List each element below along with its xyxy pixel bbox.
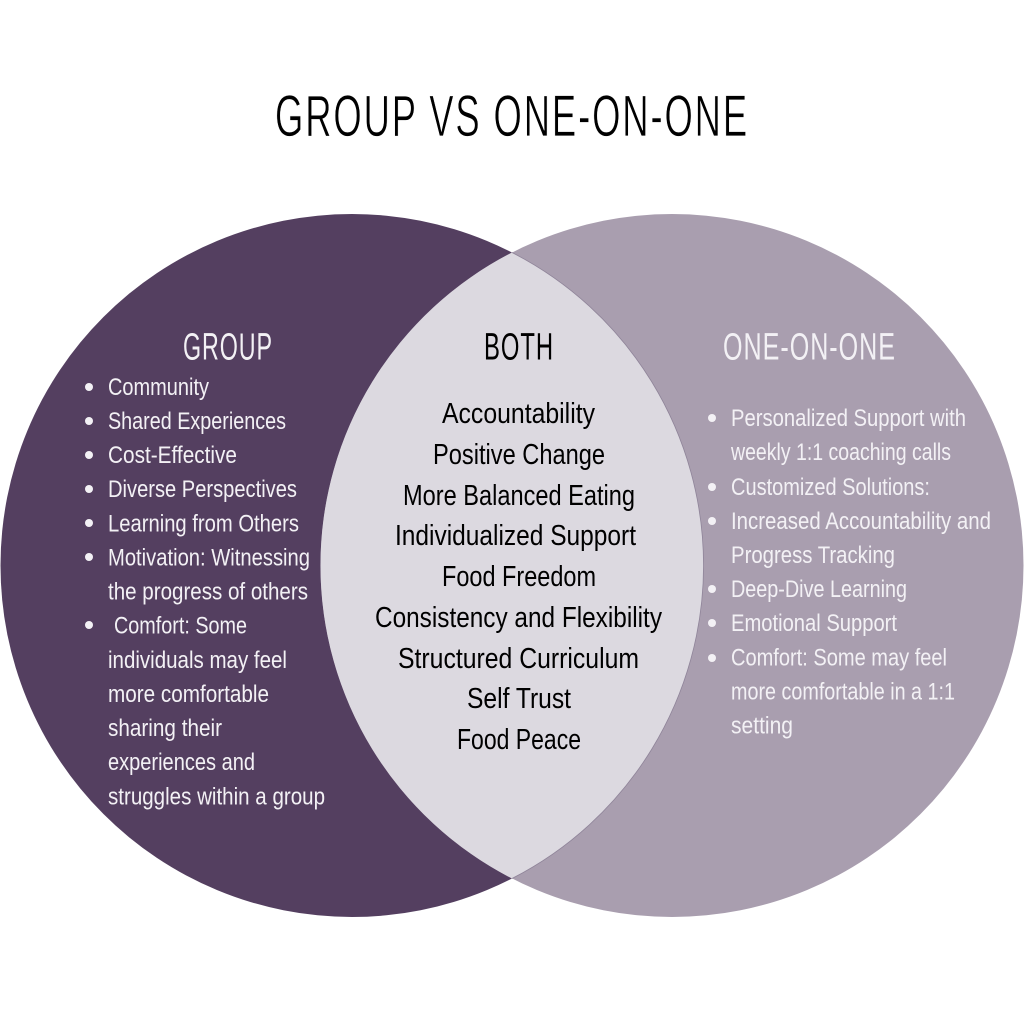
panel: both (375, 326, 662, 756)
bullet list: group: Learning from Others (108, 510, 299, 538)
bullet list: group: struggles within a group (108, 784, 325, 810)
title: GROUP VS ONE-ON-ONE (275, 84, 749, 149)
venn diagram (0, 214, 1024, 917)
list: both: Food Peace (457, 724, 581, 756)
list: both: Food Freedom (442, 561, 596, 593)
bullet list: group: Motivation: Witnessing (108, 544, 310, 572)
bullet list: group: individuals may feel (108, 647, 287, 674)
panel: one-on-one (708, 326, 991, 740)
bullet list: one-on-one: Progress Tracking (731, 542, 895, 569)
bullet list: group: Diverse Perspectives (108, 476, 297, 503)
bullet list: one-on-one: Personalized Support with (731, 405, 966, 432)
bullet list: group: the progress of others (108, 578, 308, 606)
list: both: Structured Curriculum (398, 643, 639, 675)
circle: one-on-one (320, 214, 1024, 917)
list: both: Consistency and Flexibility (375, 602, 662, 634)
bullet list: one-on-one (708, 405, 991, 740)
list: both: Individualized Support (395, 520, 636, 552)
bullet list: one-on-one: Comfort: Some may feel (731, 644, 947, 672)
panel: group (85, 326, 325, 810)
bullet list: one-on-one: setting (731, 712, 793, 740)
list: both (375, 398, 662, 756)
bullet list: group: experiences and (108, 749, 255, 776)
bullet list: group: Comfort: Some (114, 612, 247, 640)
bullet list: one-on-one: Emotional Support (731, 610, 897, 637)
bullet list: group: sharing their (108, 715, 222, 742)
heading: group: GROUP (183, 326, 273, 368)
list: both: More Balanced Eating (403, 480, 635, 512)
circle: group (0, 214, 704, 917)
overlap: both (320, 252, 704, 878)
bullet list: group: Community (108, 374, 210, 401)
heading: one-on-one: ONE-ON-ONE (723, 326, 896, 368)
bullet list: one-on-one: weekly 1:1 coaching calls (730, 439, 951, 466)
bullet list: one-on-one: Customized Solutions: (731, 474, 930, 501)
overlap edge (512, 252, 704, 878)
bullet list: one-on-one: more comfortable in a 1:1 (731, 678, 955, 706)
bullet list: group: Shared Experiences (108, 408, 286, 435)
list: both: Accountability (442, 398, 595, 430)
bullet list: group: more comfortable (108, 681, 269, 708)
list: both: Self Trust (467, 683, 571, 715)
heading: both: BOTH (484, 326, 554, 368)
bullet list: group (85, 374, 325, 810)
list: both: Positive Change (433, 439, 605, 471)
bullet list: group: Cost-Effective (108, 442, 237, 469)
bullet list: one-on-one: Deep-Dive Learning (731, 576, 907, 603)
